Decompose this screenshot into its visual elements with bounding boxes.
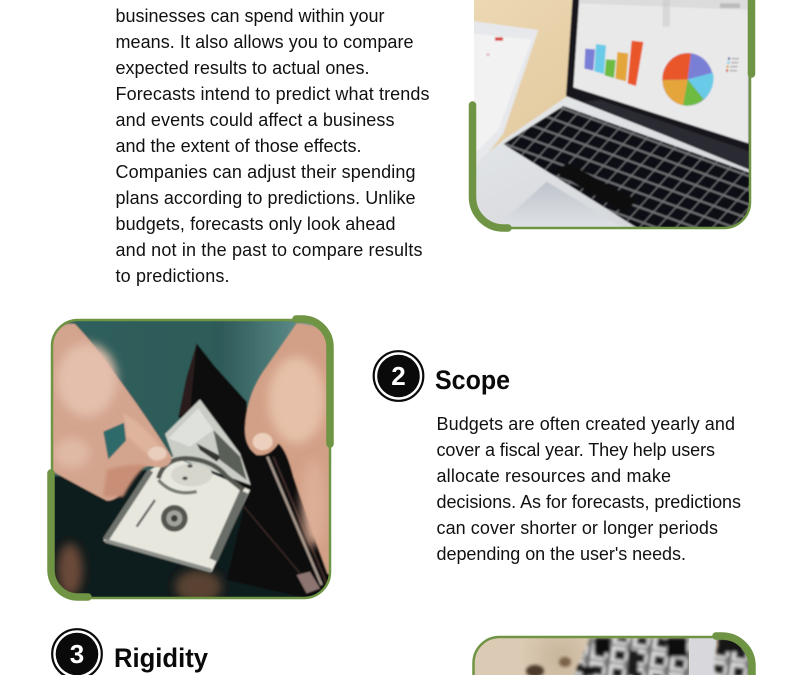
text block: scope description: decisions. As for forecasts, predictions xyxy=(436,492,741,512)
left hand xyxy=(50,324,172,501)
photo: laptop with charts xyxy=(470,0,757,233)
trackpad xyxy=(517,182,618,226)
text block: scope description: depending on the user's needs. xyxy=(436,544,686,564)
heading: Rigidity: Rigidity xyxy=(114,643,208,673)
number badge 3 xyxy=(52,629,102,675)
text block: budgets and forecasts intro: Forecasts intend to predict what trends xyxy=(116,84,430,104)
dollar bill xyxy=(103,399,251,572)
pie chart on screen xyxy=(662,53,714,106)
wallet xyxy=(178,343,333,598)
accent: wallet frame bottom-left xyxy=(51,473,88,597)
photo: plaid scarf xyxy=(474,637,754,675)
text block: budgets and forecasts intro: budgets, forecasts only look ahead xyxy=(116,214,396,234)
keyboard xyxy=(503,106,753,233)
chart legend xyxy=(726,57,739,72)
text block: budgets and forecasts intro xyxy=(116,6,430,286)
text block: budgets and forecasts intro: means. It also allows you to compare xyxy=(116,32,414,52)
text block: budgets and forecasts intro: Companies can adjust their spending xyxy=(116,162,416,182)
text block: budgets and forecasts intro: and the extent of those effects. xyxy=(116,136,362,156)
right hand xyxy=(245,323,333,577)
text block: scope description xyxy=(436,414,741,564)
accent: laptop frame bottom-left xyxy=(472,105,508,228)
text block: budgets and forecasts intro: plans according to predictions. Unlike xyxy=(116,188,416,208)
text block: scope description: cover a fiscal year. They help users xyxy=(436,440,715,460)
text block: budgets and forecasts intro: expected results to actual ones. xyxy=(116,58,370,78)
photo: hands opening wallet xyxy=(50,317,333,603)
text block: budgets and forecasts intro: to predictions. xyxy=(116,266,230,286)
text block: scope description: allocate resources and make xyxy=(436,466,671,486)
accent: laptop frame top-right xyxy=(748,0,755,74)
number badge 2: 2 xyxy=(391,361,406,391)
heading: Scope: Scope xyxy=(435,365,510,395)
laptop screen xyxy=(566,0,753,170)
accent: plaid frame top-right xyxy=(716,636,752,675)
text block: budgets and forecasts intro: and not in the past to compare results xyxy=(116,240,422,260)
number badge 3: 3 xyxy=(70,639,84,669)
text block: budgets and forecasts intro: businesses can spend within your xyxy=(116,6,384,26)
text block: budgets and forecasts intro: and events could affect a business xyxy=(116,110,394,130)
accent: wallet frame top-right xyxy=(296,319,330,444)
number badge 2 xyxy=(374,351,423,401)
text block: scope description: can cover shorter or longer periods xyxy=(436,518,718,538)
text block: scope description: Budgets are often created yearly and xyxy=(436,414,735,434)
tablet xyxy=(470,21,538,168)
bar chart on screen xyxy=(584,41,643,86)
